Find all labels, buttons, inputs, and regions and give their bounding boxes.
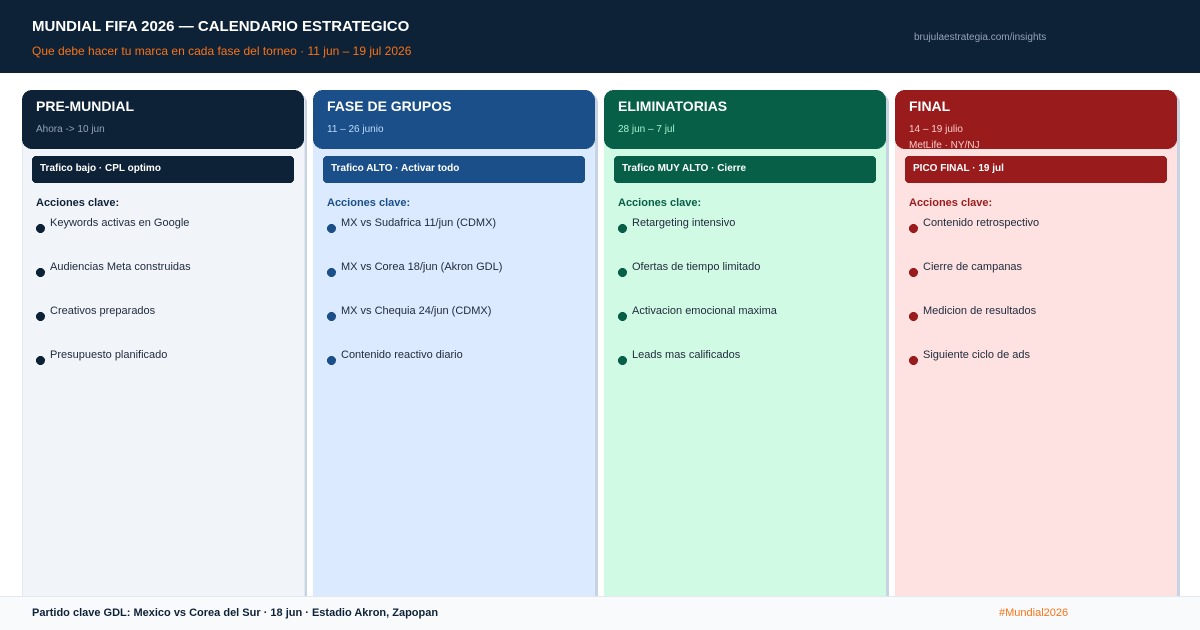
action item: MX vs Corea 18/jun (Akron GDL) [341,261,502,273]
action item: Cierre de campanas [923,261,1022,273]
key match note: Partido clave GDL: Mexico vs Corea del Sur · 18 jun · Estadio Akron, Zapopan [32,607,438,619]
badge: eliminatorias: Trafico MUY ALTO · Cierre [622,163,746,174]
heading: eliminatorias: ELIMINATORIAS [618,98,727,114]
action item [909,217,1039,233]
action item [327,217,496,233]
dates: final: 14 – 19 julio [909,124,963,135]
action item: MX vs Sudafrica 11/jun (CDMX) [341,217,496,229]
action item: Contenido retrospectivo [923,217,1039,229]
footer bar [0,596,1200,630]
action item [327,349,463,365]
action item [36,349,167,365]
action item: Creativos preparados [50,305,155,317]
website url: brujulaestrategia.com/insights [914,32,1046,43]
header banner [0,0,1200,73]
panel: eliminatorias [604,90,889,596]
action item: Keywords activas en Google [50,217,189,229]
action item [36,261,191,277]
action item: Leads mas calificados [632,349,740,361]
action item: Contenido reactivo diario [341,349,463,361]
dates: pre-mundial: Ahora -> 10 jun [36,124,105,135]
action item [909,349,1030,365]
title: MUNDIAL FIFA 2026 — CALENDARIO ESTRATEGICO [32,18,409,35]
action item: Retargeting intensivo [632,217,735,229]
hashtag: #Mundial2026 [999,607,1068,619]
venue: final: MetLife · NY/NJ [909,140,980,151]
dates: eliminatorias: 28 jun – 7 jul [618,124,675,135]
action item: Presupuesto planificado [50,349,167,361]
action item [618,261,760,277]
action item: Activacion emocional maxima [632,305,777,317]
actions label: eliminatorias: Acciones clave: [618,197,701,209]
action item [327,305,491,321]
action item [327,261,502,277]
action item [618,305,777,321]
action item: Siguiente ciclo de ads [923,349,1030,361]
actions label: pre-mundial: Acciones clave: [36,197,119,209]
action item [36,305,155,321]
panel: pre-mundial [22,90,307,596]
badge: fase de grupos: Trafico ALTO · Activar todo [331,163,459,174]
action item: MX vs Chequia 24/jun (CDMX) [341,305,491,317]
actions label: fase de grupos: Acciones clave: [327,197,410,209]
panel: fase de grupos [313,90,598,596]
dates: fase de grupos: 11 – 26 junio [327,124,384,135]
heading: pre-mundial: PRE-MUNDIAL [36,98,134,114]
heading: final: FINAL [909,98,950,114]
badge: final: PICO FINAL · 19 jul [913,163,1004,174]
action item [618,217,735,233]
action item: Medicion de resultados [923,305,1036,317]
panel: final [895,90,1180,596]
action item: Audiencias Meta construidas [50,261,191,273]
action item: Ofertas de tiempo limitado [632,261,760,273]
action item [909,305,1036,321]
action item [36,217,189,233]
action item [618,349,740,365]
action item [909,261,1022,277]
badge: pre-mundial: Trafico bajo · CPL optimo [40,163,161,174]
subtitle: Que debe hacer tu marca en cada fase del torneo · 11 jun – 19 jul 2026 [32,44,411,58]
heading: fase de grupos: FASE DE GRUPOS [327,98,451,114]
actions label: final: Acciones clave: [909,197,992,209]
